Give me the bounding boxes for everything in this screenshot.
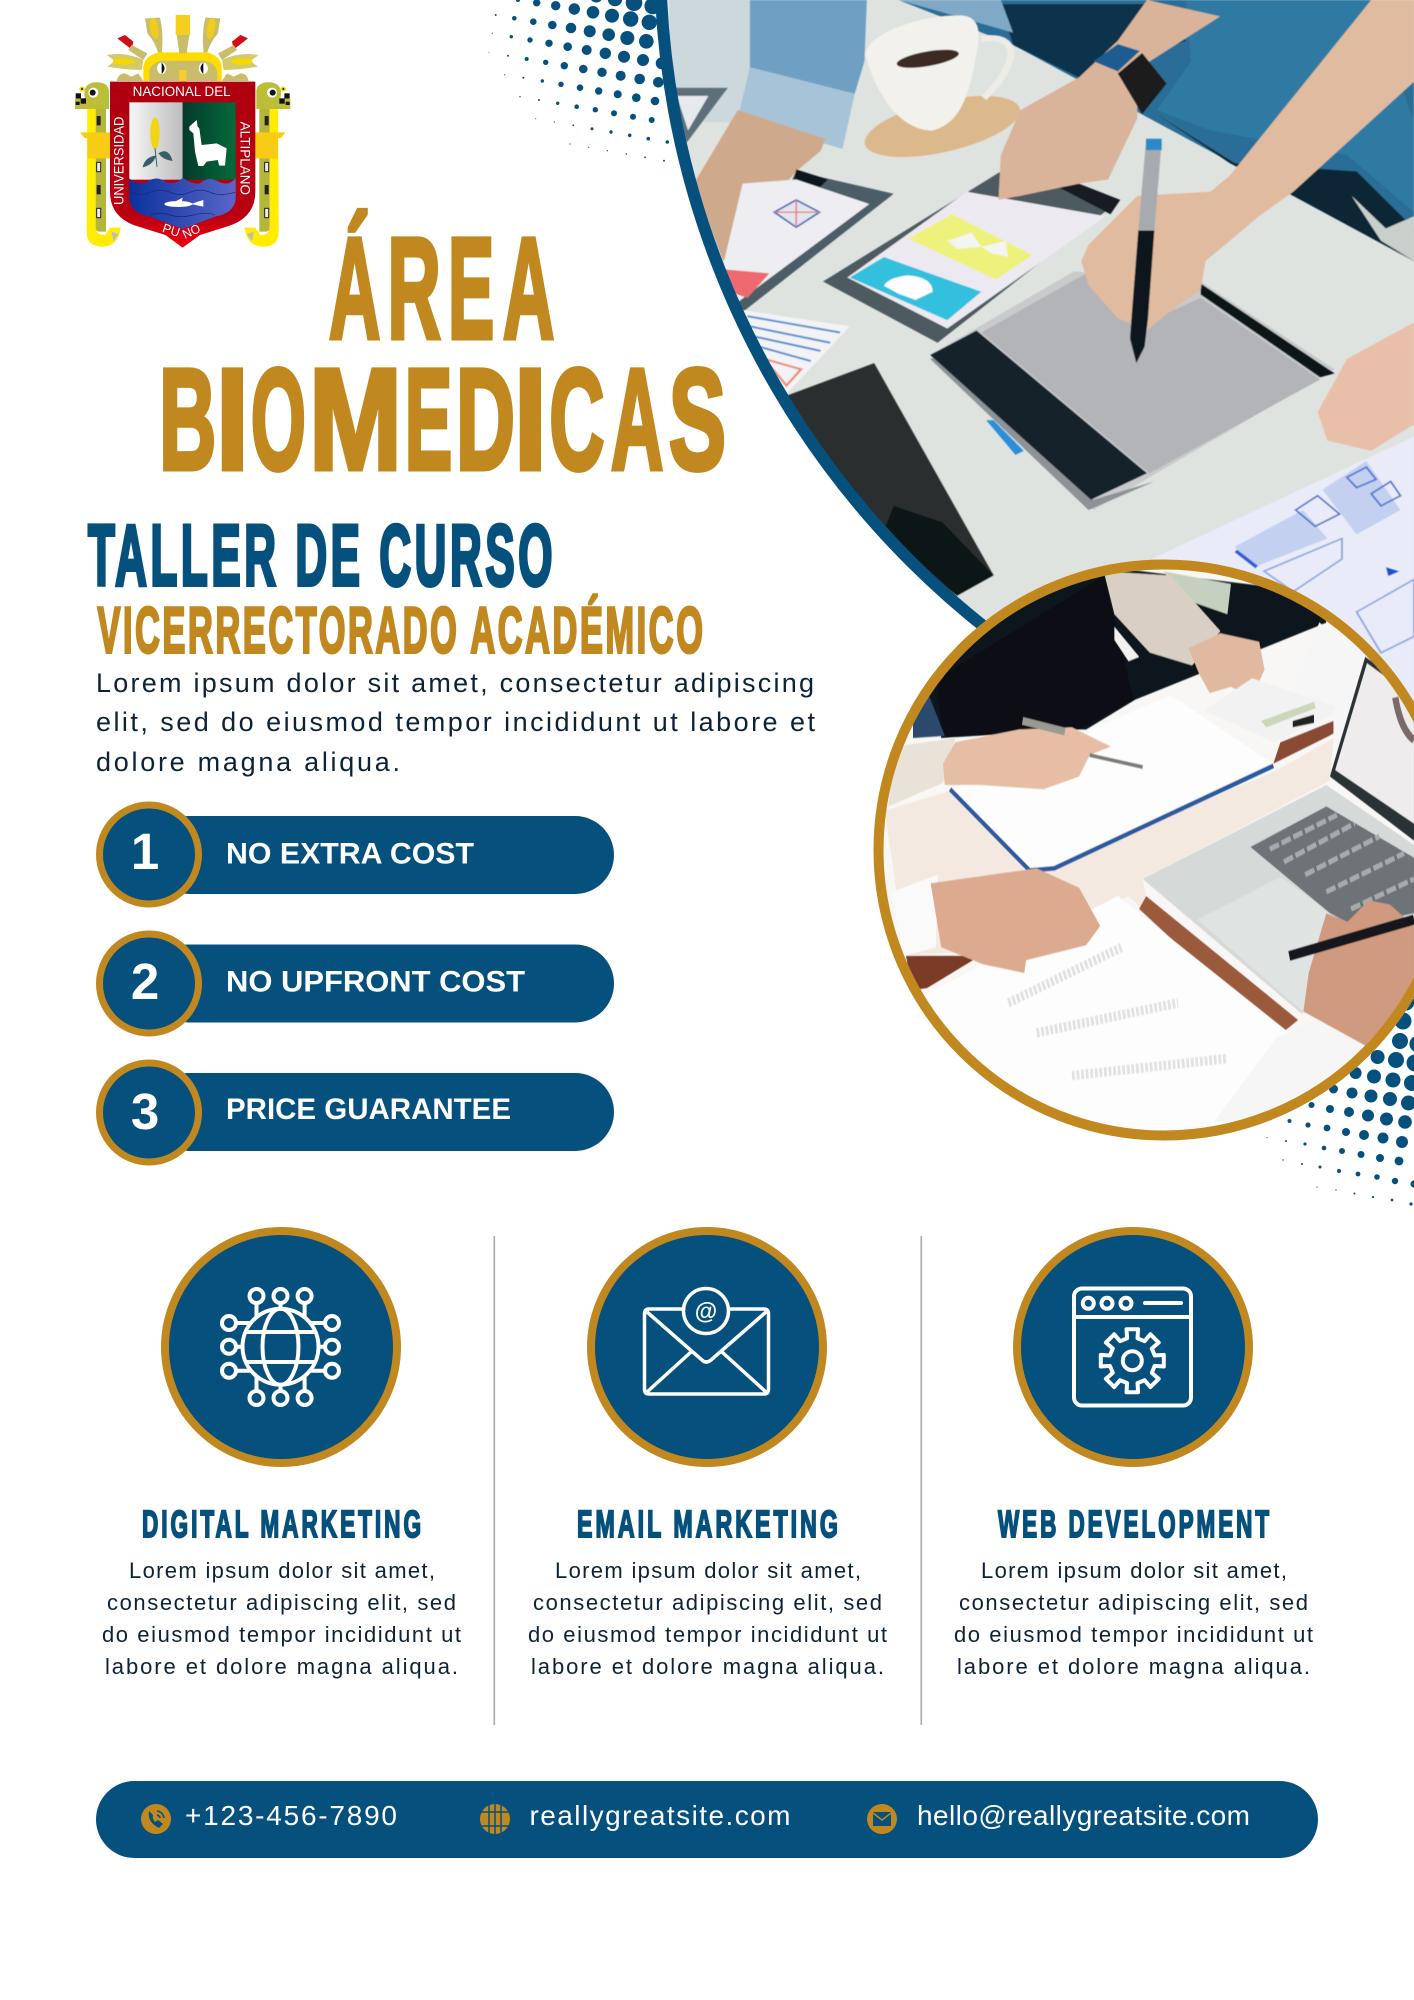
icon: mail (867, 1804, 897, 1834)
description: consectetur adipiscing elit, sed (107, 1590, 456, 1615)
icon: envelope (591, 1231, 823, 1463)
pill: no extra cost (100, 805, 614, 904)
logo: university crest (75, 15, 290, 248)
description: Lorem ipsum dolor sit amet, (555, 1558, 861, 1583)
title: M (309, 339, 402, 500)
description: do eiusmod tempor incididunt ut (528, 1622, 887, 1647)
contact bar (96, 1781, 1318, 1858)
title: S (669, 339, 726, 500)
pill: no upfront cost (100, 934, 614, 1033)
heading: vicerrectorado: VICERRECTORADO ACADÉMICO (98, 594, 706, 666)
heading: EMAIL MARKETING (577, 1504, 841, 1546)
icon: phone (141, 1804, 171, 1834)
description: do eiusmod tempor incididunt ut (102, 1622, 461, 1647)
description: do eiusmod tempor incididunt ut (954, 1622, 1313, 1647)
title: E (448, 208, 494, 369)
title: I (514, 339, 547, 500)
logo: university crest: NO (180, 221, 203, 242)
pill: no extra cost: 1 (131, 823, 159, 880)
description (102, 1558, 461, 1679)
title: A (611, 339, 663, 500)
description: consectetur adipiscing elit, sed (959, 1590, 1308, 1615)
description (528, 1558, 887, 1679)
pill: price guarantee (100, 1063, 614, 1162)
column: digital marketing (102, 1231, 461, 1679)
title (159, 208, 726, 500)
title: Á (329, 208, 380, 369)
title: R (388, 208, 441, 369)
description: labore et dolore magna aliqua. (105, 1654, 458, 1679)
logo: university crest: PU (161, 221, 182, 240)
intro paragraph: Lorem ipsum dolor sit amet, consectetur adipiscing (96, 668, 814, 698)
intro paragraph: elit, sed do eiusmod tempor incididunt ut labore et (96, 707, 815, 737)
icon: globe (480, 1804, 510, 1834)
text: website: reallygreatsite.com (530, 1800, 790, 1831)
heading: taller de curso: TALLER DE CURSO (88, 508, 556, 604)
description: consectetur adipiscing elit, sed (533, 1590, 882, 1615)
title: B (159, 339, 216, 500)
text: phone: +123-456-7890 (185, 1800, 397, 1831)
icon: network globe (165, 1231, 397, 1463)
description: Lorem ipsum dolor sit amet, (129, 1558, 435, 1583)
column: web development (954, 1231, 1313, 1679)
description: labore et dolore magna aliqua. (957, 1654, 1310, 1679)
pill: price guarantee: PRICE GUARANTEE (226, 1093, 511, 1126)
title: C (549, 339, 604, 500)
pill: no extra cost: NO EXTRA COST (226, 838, 474, 870)
title: E (405, 339, 452, 500)
description: Lorem ipsum dolor sit amet, (981, 1558, 1287, 1583)
logo: university crest: NACIONAL DEL (133, 84, 231, 99)
photo: business team reviewing documents in circle (870, 555, 1414, 1145)
logo: university crest: ALTIPLANO (238, 122, 253, 195)
column: email marketing (528, 1231, 887, 1679)
title: A (503, 208, 554, 369)
logo: university crest: UNIVERSIDAD (111, 117, 126, 205)
halftone dots: top (488, 0, 669, 162)
title: I (216, 339, 249, 500)
heading: DIGITAL MARKETING (142, 1504, 424, 1546)
text: email: hello@reallygreatsite.com (917, 1800, 1250, 1831)
title: D (456, 339, 515, 500)
halftone dots: bottom right (1266, 994, 1414, 1206)
description: labore et dolore magna aliqua. (531, 1654, 884, 1679)
pill: no upfront cost: NO UPFRONT COST (226, 966, 525, 998)
intro paragraph (96, 668, 815, 777)
pill: price guarantee: 3 (131, 1083, 159, 1140)
photo: designers at table with arc border (656, 0, 1414, 702)
icon: browser window with gear (1017, 1231, 1249, 1463)
title: O (251, 339, 306, 500)
icon: envelope: @ (695, 1298, 717, 1324)
description (954, 1558, 1313, 1679)
pill: no upfront cost: 2 (131, 953, 159, 1010)
intro paragraph: dolore magna aliqua. (96, 747, 400, 777)
